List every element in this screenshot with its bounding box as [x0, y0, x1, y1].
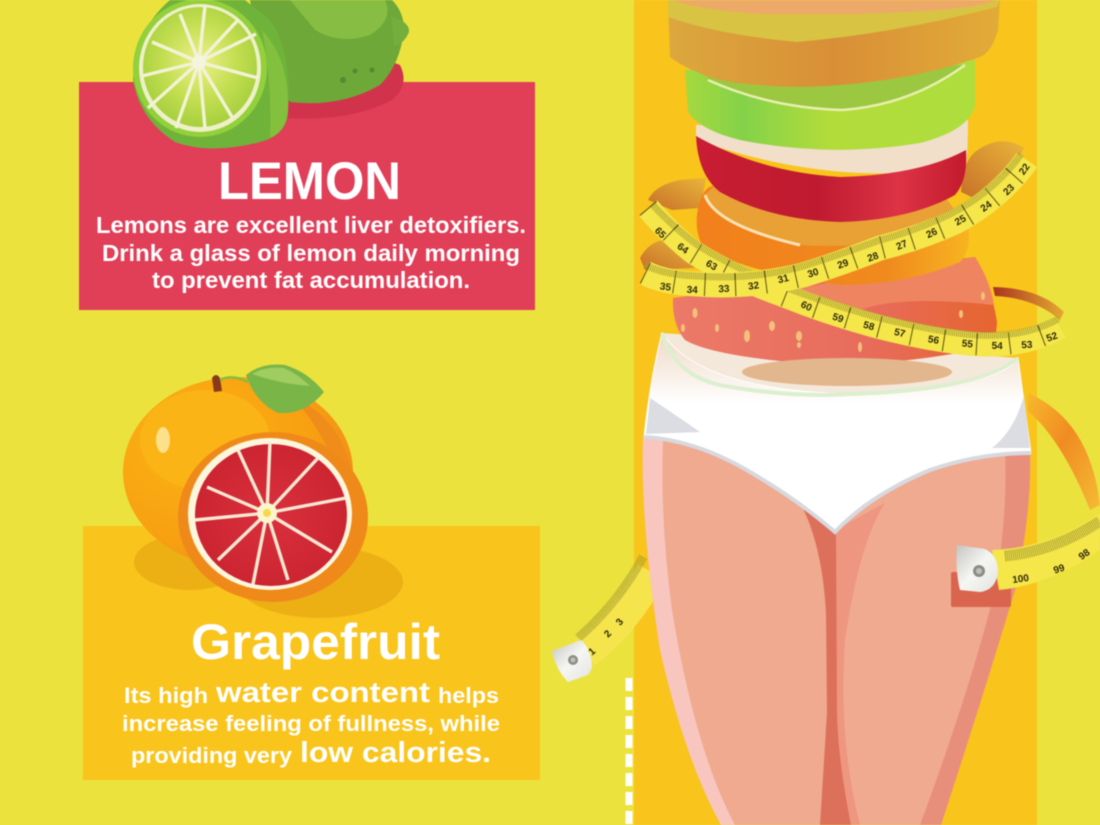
tape: waist upper strand: 34: [686, 285, 698, 296]
grapefruit description: increase feeling of fullness, while: [122, 711, 500, 736]
tape: waist upper strand: 24: [979, 199, 995, 215]
strawberry slice: [673, 257, 997, 364]
legs: [643, 400, 1030, 825]
lemon cast shadow: [285, 62, 404, 119]
tape: waist upper strand: 30: [806, 267, 821, 281]
tape: waist upper strand: 26: [925, 226, 940, 241]
tape: waist lower strand: 64: [675, 241, 691, 257]
tape: right hip end with clip: [951, 513, 1100, 607]
tape: waist upper strand: 32: [747, 280, 760, 293]
dashed guide line: [626, 678, 632, 825]
tape: waist upper strand: 25: [953, 213, 969, 228]
lime slice: [685, 60, 975, 150]
tape: lower back loop: [1028, 393, 1100, 510]
tape: waist lower strand: 65: [652, 225, 668, 241]
tape: waist lower strand: 56: [927, 334, 940, 347]
tape: waist upper strand: 33: [718, 284, 730, 295]
icon: leaf: [220, 364, 324, 413]
icon: whole lime: [250, 0, 409, 103]
grapefruit description: providing very: [131, 743, 293, 768]
grapefruit description: water content: [215, 677, 430, 709]
icon: cut grapefruit: [178, 432, 368, 602]
tape: waist upper strand: 22: [1017, 161, 1033, 177]
top fruit slice: [668, 0, 1000, 87]
back loops of waist tape: [640, 141, 1064, 320]
panel: lemon: [79, 0, 535, 310]
tape: waist upper strand: 31: [777, 273, 791, 286]
lemon description: [96, 212, 526, 293]
tape: right hip end with clip: 100: [1012, 573, 1030, 586]
tape: left lower end: 3: [614, 616, 626, 628]
icon: tape clip left: [552, 640, 592, 682]
center column panel: [634, 0, 1037, 825]
grapefruit description: Its high: [124, 683, 208, 708]
tape: right hip end with clip: 99: [1052, 563, 1067, 577]
tape: waist upper strand: 28: [866, 250, 881, 265]
tape: waist lower strand: 59: [831, 312, 845, 326]
heading: lemon: LEMON: [218, 152, 401, 211]
tape: waist upper strand: 35: [659, 281, 672, 294]
tape: left lower end: 1: [587, 646, 598, 658]
tape: waist lower strand: 63: [704, 258, 719, 274]
tape: waist upper strand: 29: [836, 257, 851, 272]
tape: waist upper strand: 23: [1001, 182, 1017, 198]
lemon description: to prevent fat accumulation.: [152, 267, 470, 293]
orange slice: [697, 185, 969, 285]
icon: whole grapefruit: [123, 375, 353, 567]
tape: waist lower strand: [648, 204, 1060, 352]
grapefruit card background: [83, 526, 540, 780]
grapefruit description: low calories.: [300, 737, 491, 769]
tape: left lower end: [578, 557, 652, 658]
tape: left lower end: 2: [602, 628, 614, 640]
lemon description: Drink a glass of lemon daily morning: [102, 240, 520, 266]
icon: cut lime: [133, 0, 289, 148]
grapefruit cast shadows: [134, 534, 403, 618]
heading: grapefruit: Grapefruit: [191, 614, 440, 670]
grapefruit description: [122, 677, 500, 769]
lemon description: Lemons are excellent liver detoxifiers.: [96, 212, 526, 238]
lemon card background: [79, 82, 535, 310]
tape: waist lower strand: 53: [1021, 340, 1033, 351]
tape: waist lower strand: 54: [991, 341, 1003, 352]
tape: waist lower strand: 60: [799, 299, 814, 314]
tape: waist upper strand: 27: [895, 238, 910, 253]
tape: waist upper strand: [645, 154, 1033, 296]
icon: tape clip right: [956, 545, 998, 592]
tape: waist lower strand: 52: [1045, 330, 1060, 345]
grapefruit description: helps: [438, 683, 499, 708]
tape: waist lower strand: 58: [862, 320, 876, 333]
underwear back waistband: [662, 333, 1018, 400]
tape: waist lower strand: 55: [961, 338, 974, 351]
tape: right hip end with clip: 98: [1077, 547, 1093, 563]
panel: grapefruit: [83, 364, 540, 780]
tape: waist lower strand: 57: [893, 327, 907, 340]
apple slice: [696, 120, 968, 222]
underwear: [644, 333, 1031, 532]
